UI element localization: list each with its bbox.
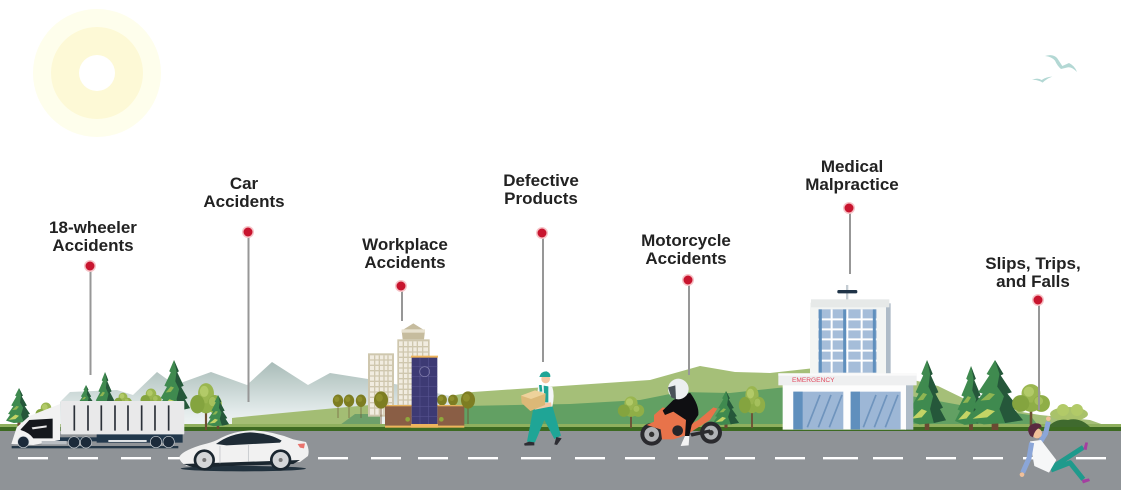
forearm [533, 402, 552, 410]
door right [851, 392, 901, 429]
label: workplace accidents: Accidents [364, 253, 446, 272]
lower block [778, 373, 917, 430]
windows [818, 309, 877, 373]
door left [793, 392, 843, 429]
raised arm [1040, 422, 1048, 442]
icon: birds [1032, 55, 1077, 83]
tower [810, 299, 891, 374]
shoes [524, 442, 534, 446]
legs [527, 406, 561, 442]
label: defective products: Defective [503, 171, 579, 190]
pin: defective products [536, 227, 548, 362]
small shrubs [405, 417, 444, 422]
pin: workplace [395, 280, 407, 321]
label: motorcycle accidents: Motorcycle [641, 231, 731, 250]
worker carrying box [521, 371, 562, 446]
brown walls [385, 405, 464, 428]
fairing [647, 407, 717, 439]
boot [681, 436, 689, 446]
lower arm [1023, 443, 1032, 473]
falling person [1020, 416, 1090, 483]
cab [11, 404, 178, 448]
green hills [232, 366, 1121, 431]
legs [1051, 447, 1083, 479]
bushes [1048, 404, 1090, 427]
torso [536, 385, 554, 407]
pin: slips [1032, 294, 1044, 410]
hospital [778, 285, 917, 430]
box [521, 390, 546, 411]
pin: car [242, 226, 254, 402]
trees: left group [6, 360, 229, 430]
shoes [1083, 442, 1088, 450]
head and cap [541, 375, 550, 383]
rider body [663, 393, 698, 436]
label: car accidents: Accidents [203, 192, 285, 211]
antenna [837, 285, 857, 300]
label: medical malpractice: Malpractice [805, 175, 899, 194]
background mountains [60, 362, 450, 428]
trees: middle [618, 386, 765, 428]
road [0, 431, 1121, 490]
head [1032, 428, 1042, 438]
trees: front of city [374, 391, 475, 424]
label: 18-wheeler accidents: Accidents [52, 236, 134, 255]
blue tower [411, 356, 438, 428]
raised hand [1046, 416, 1051, 421]
lower hand [1020, 472, 1024, 477]
trailer [53, 401, 184, 443]
label: medical malpractice: Medical [821, 157, 883, 176]
label: car accidents: Car [230, 174, 259, 193]
left tower [368, 353, 394, 417]
label: motorcycle accidents: Accidents [645, 249, 727, 268]
trees: city group [333, 395, 458, 418]
truck [11, 401, 184, 448]
label: 18-wheeler accidents: 18-wheeler [49, 218, 137, 237]
label: defective products: Products [504, 189, 578, 208]
pin: motorcycle [682, 274, 694, 375]
car [179, 430, 309, 471]
label: slips, trips, and falls: Slips, Trips, [985, 254, 1081, 273]
label: slips, trips, and falls: and Falls [996, 272, 1070, 291]
helmet [668, 379, 689, 399]
front wheel [640, 423, 663, 446]
motorcycle and rider [640, 379, 722, 446]
buildings: workplace [368, 323, 464, 428]
ground strip [0, 424, 1121, 432]
truck wheels [18, 436, 174, 448]
label: workplace accidents: Workplace [362, 235, 448, 254]
centre tower [397, 323, 430, 406]
pin: medical [843, 202, 855, 274]
torso [1030, 440, 1056, 473]
emergency sign: EMERGENCY [792, 377, 835, 384]
pin: 18-wheeler [84, 260, 96, 375]
trees: right group [908, 360, 1090, 430]
sun [33, 9, 161, 137]
road dashes [18, 457, 1106, 459]
rear wheel [700, 422, 722, 444]
